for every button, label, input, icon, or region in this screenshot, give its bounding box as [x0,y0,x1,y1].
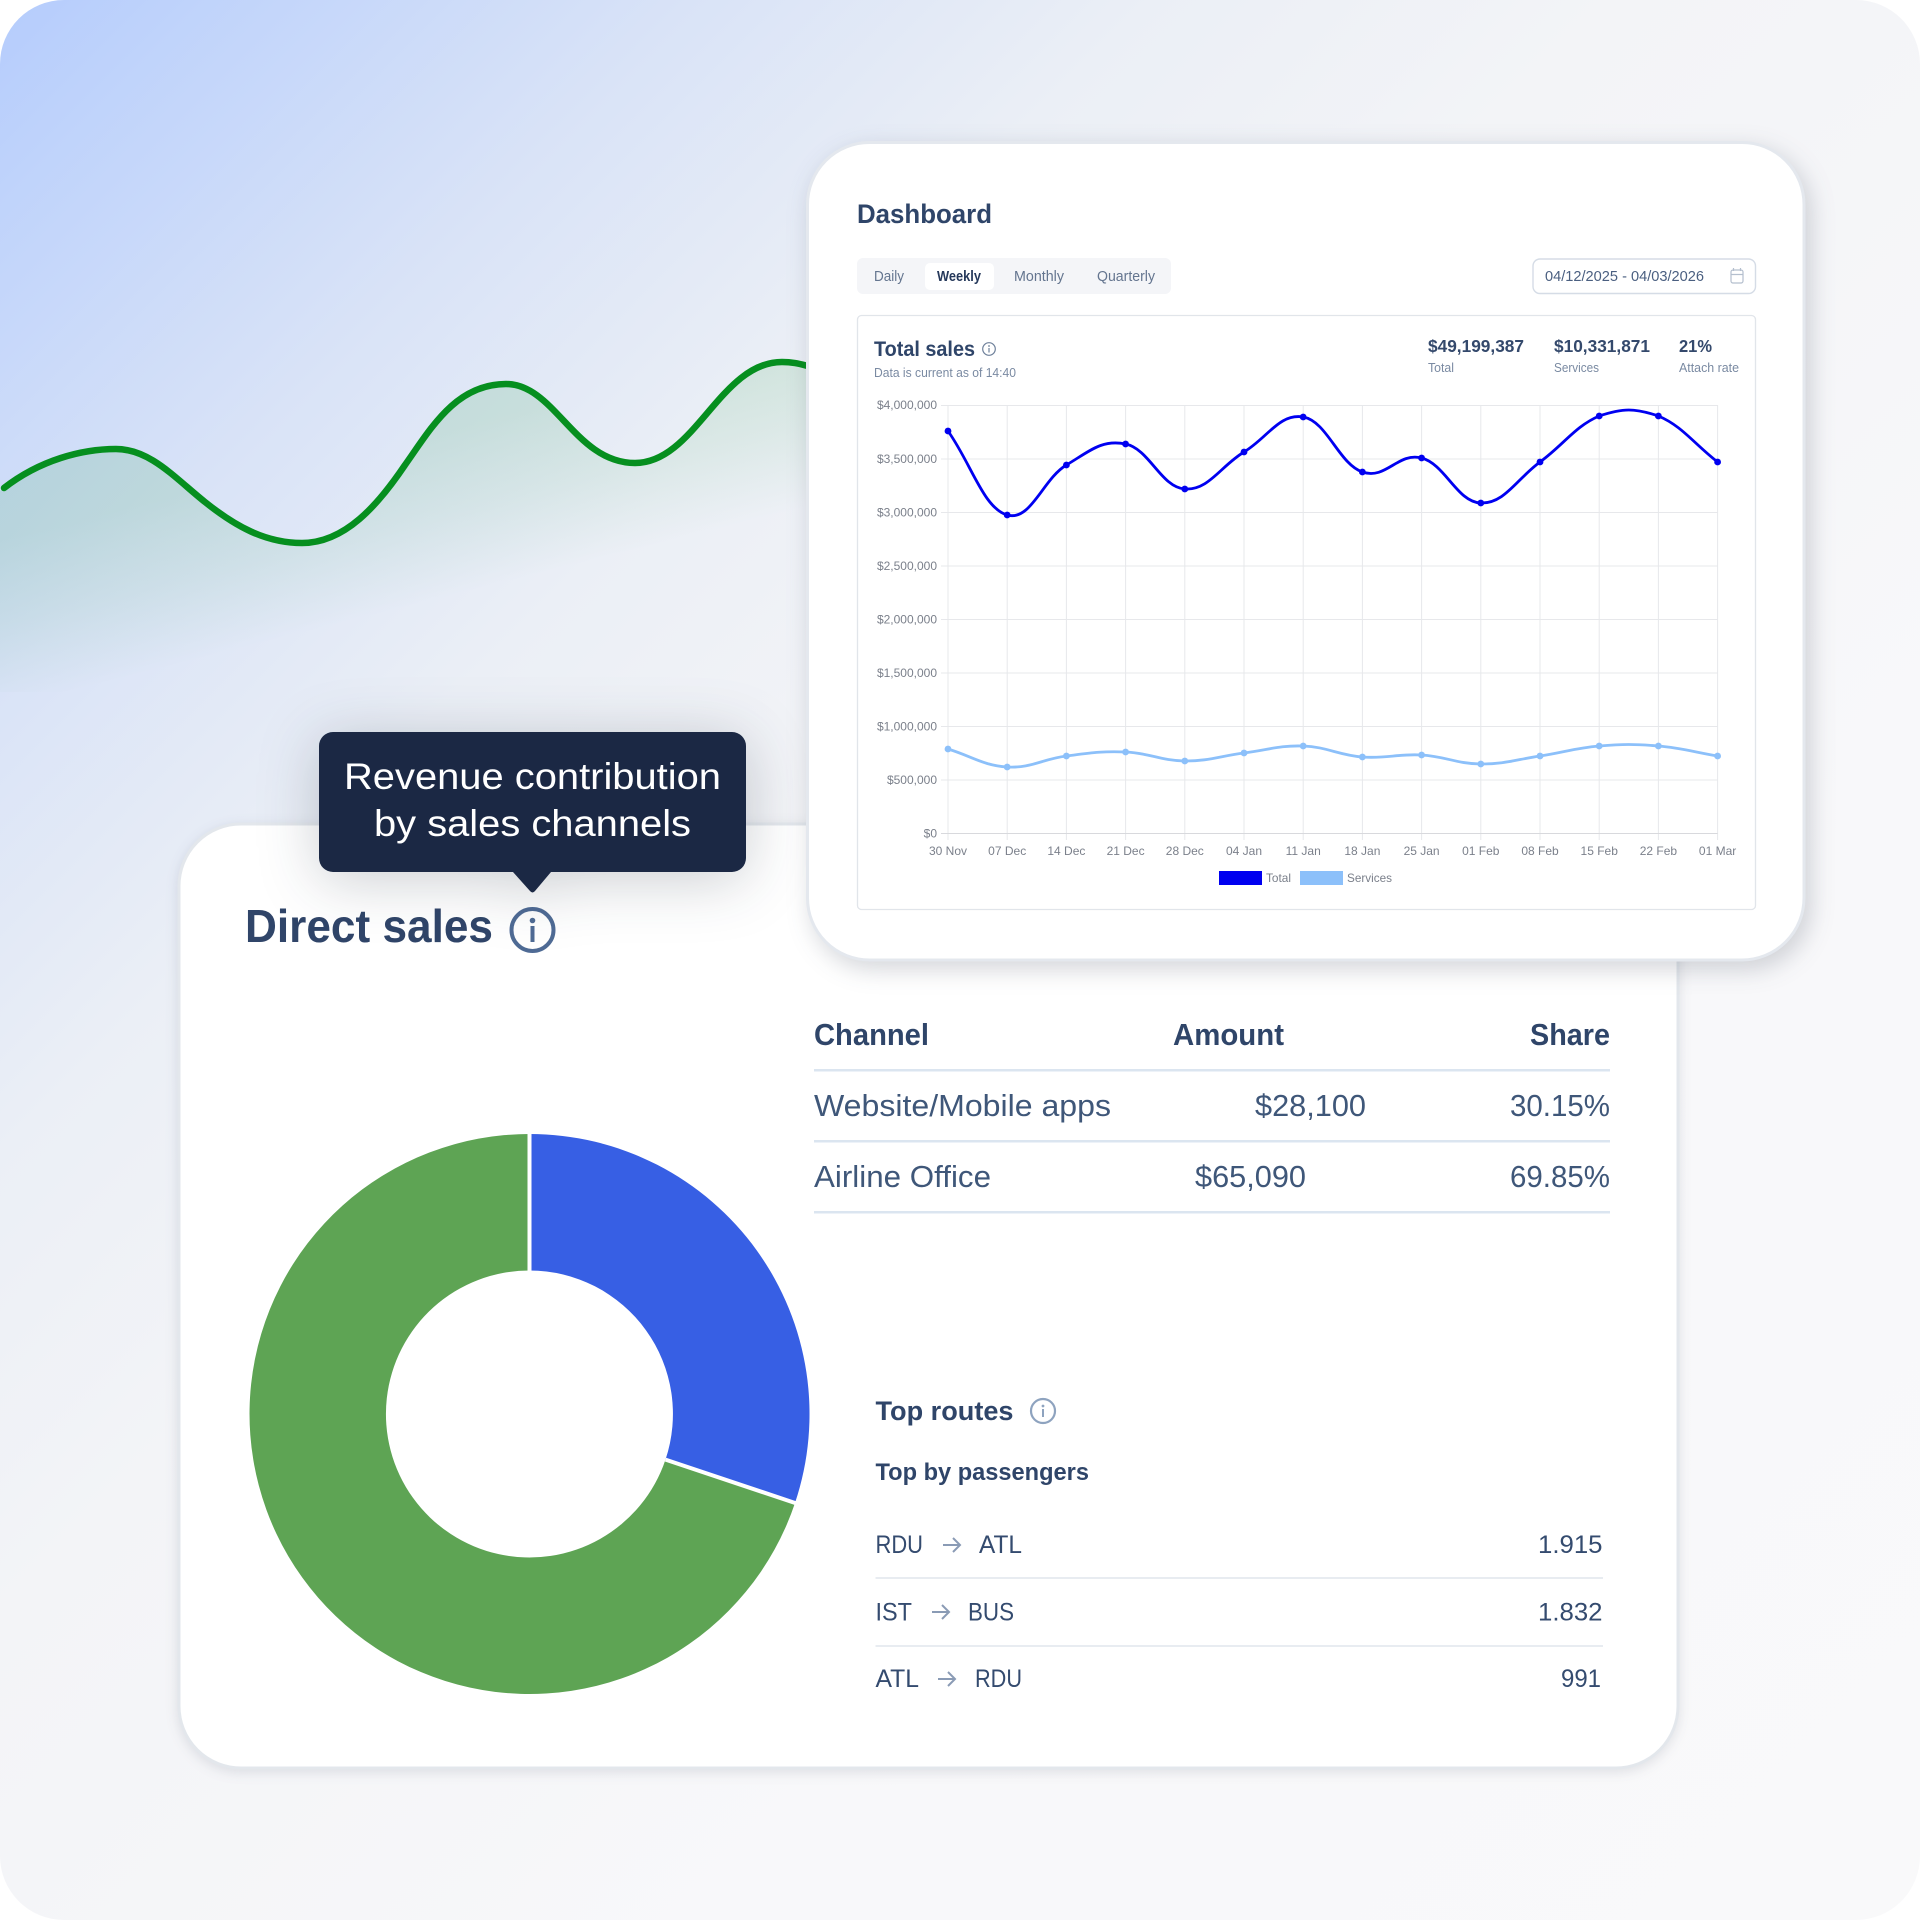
panel: dashboard card [808,142,1804,960]
table row: website: $28,100 [1255,1088,1366,1123]
y axis labels: $2,500,000 [877,559,937,573]
y axis labels: $3,000,000 [877,506,937,520]
x axis labels: 11 Jan [1286,844,1321,858]
route row: IST to BUS: BUS [968,1598,1014,1626]
icon: direct sales info [512,909,554,951]
callout: revenue contribution tooltip: Revenue contribution [344,755,721,797]
table row: airline office: $65,090 [1195,1159,1306,1194]
y axis labels [877,398,937,840]
route row: IST to BUS: 1.832 [1538,1598,1602,1626]
metric: attach rate: 21% [1679,336,1712,356]
top routes section [876,1396,1603,1693]
table header: Channel [814,1017,929,1052]
icon: top routes info [1031,1399,1055,1423]
callout: revenue contribution tooltip: by sales channels [374,802,691,844]
table row: airline office [814,1159,1610,1194]
date range picker [1533,259,1756,294]
route row: ATL to RDU: ATL [876,1665,919,1693]
x axis labels: 07 Dec [988,844,1026,858]
period tabs: Monthly [1014,269,1065,285]
table row: airline office: Airline Office [814,1159,991,1194]
y axis labels: $500,000 [887,773,937,787]
panel: total sales chart [858,316,1756,910]
series: services [945,743,1721,770]
x axis labels: 01 Mar [1699,844,1736,858]
route row: RDU to ATL: 1.915 [1538,1531,1602,1559]
period tabs: Weekly [937,269,981,285]
metric: services: Services [1554,361,1599,375]
table row: website: Website/Mobile apps [814,1088,1111,1123]
y axis labels: $1,000,000 [877,720,937,734]
line chart [877,398,1736,885]
heading: direct sales: Direct sales [245,900,493,952]
x axis labels: 22 Feb [1640,844,1677,858]
heading: total sales: Total sales [874,338,975,361]
route row: RDU to ATL: RDU [876,1531,923,1559]
period tabs [857,258,1171,294]
route row: RDU to ATL: ATL [979,1531,1022,1559]
metric: attach rate: Attach rate [1679,361,1739,375]
x axis labels: 04 Jan [1226,844,1262,858]
date range picker: 04/12/2025 - 04/03/2026 [1545,269,1704,285]
period tabs: Daily [874,269,905,285]
y axis labels: $4,000,000 [877,398,937,412]
heading: top routes: Top routes [876,1396,1014,1426]
chart legend: Services [1347,871,1392,885]
table header [814,1017,1610,1052]
x axis labels: 15 Feb [1581,844,1618,858]
decorative green area chart [0,362,808,692]
x axis labels: 25 Jan [1404,844,1440,858]
metric: total: $49,199,387 [1428,336,1524,356]
route row: RDU to ATL [876,1531,1602,1559]
table row: website: 30.15% [1510,1088,1610,1123]
table row: airline office: 69.85% [1510,1159,1610,1194]
y axis labels: $2,000,000 [877,612,937,626]
x axis labels: 30 Nov [929,844,967,858]
data freshness note: Data is current as of 14:40 [874,365,1016,380]
metric: services [1554,336,1650,375]
metric: total [1428,336,1524,375]
x axis labels: 14 Dec [1047,844,1085,858]
x axis labels: 21 Dec [1107,844,1145,858]
x axis labels [929,844,1736,858]
callout: revenue contribution tooltip [319,732,746,892]
x axis labels: 18 Jan [1344,844,1380,858]
route row: ATL to RDU: 991 [1561,1665,1601,1693]
route row: ATL to RDU: RDU [975,1665,1022,1693]
y axis labels: $1,500,000 [877,666,937,680]
route row: IST to BUS [876,1598,1602,1626]
chart legend [1219,871,1392,885]
y axis labels: $3,500,000 [877,452,937,466]
x axis labels: 28 Dec [1166,844,1204,858]
table header: Amount [1173,1017,1284,1052]
table row: website [814,1088,1610,1123]
route row: ATL to RDU [876,1665,1601,1693]
panel: direct sales card [179,824,1678,1768]
channel table [814,1017,1610,1214]
subheading: top by passengers: Top by passengers [876,1459,1089,1486]
period tabs: Quarterly [1097,269,1156,285]
donut chart [250,1132,810,1694]
series: total [945,410,1721,518]
table header: Share [1530,1017,1610,1052]
metric: services: $10,331,871 [1554,336,1650,356]
chart legend: Total [1266,871,1291,885]
y axis labels: $0 [924,826,937,840]
heading: dashboard: Dashboard [857,199,992,229]
icon: total sales info [983,343,995,355]
x axis labels: 01 Feb [1462,844,1500,858]
metric: total: Total [1428,361,1454,375]
x axis labels: 08 Feb [1521,844,1559,858]
metric: attach rate [1679,336,1739,375]
route row: IST to BUS: IST [876,1598,912,1626]
